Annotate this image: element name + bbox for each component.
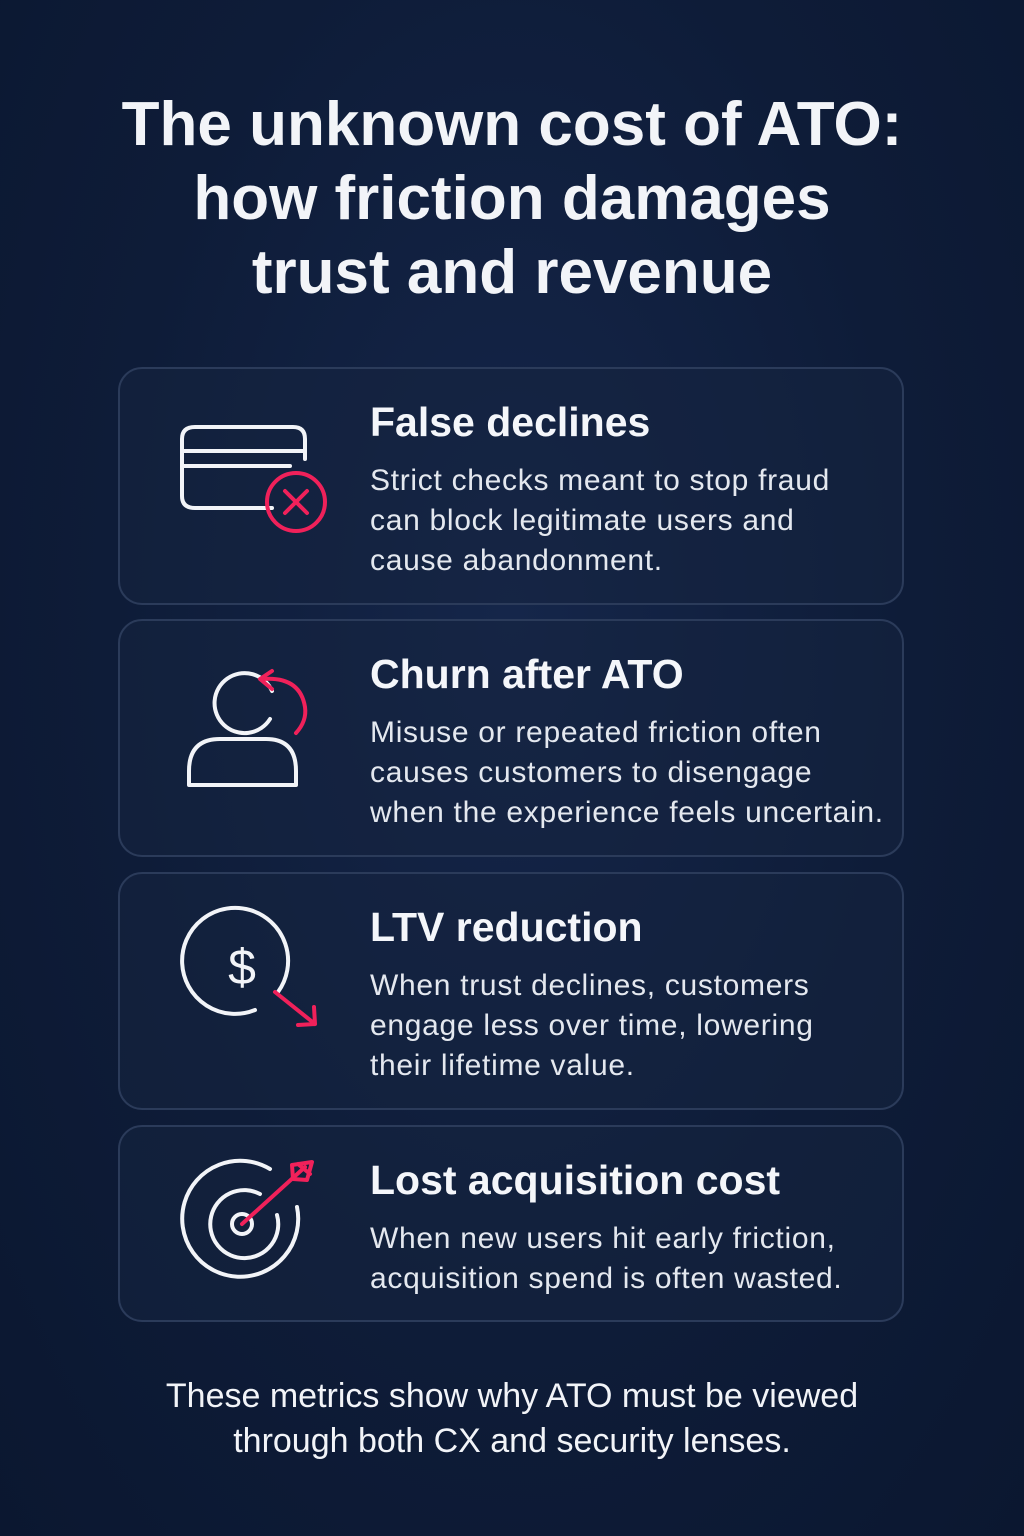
text: Misuse or repeated friction often bbox=[370, 716, 822, 749]
text: their lifetime value. bbox=[370, 1049, 635, 1082]
panel: LTV bbox=[118, 872, 904, 1110]
panel: churn bbox=[118, 619, 904, 857]
icon: target with arrow bbox=[180, 1158, 314, 1279]
text bbox=[370, 1222, 842, 1295]
icon: dollar with down arrow: $ bbox=[228, 939, 256, 995]
text bbox=[370, 716, 884, 829]
panel: acquisition bbox=[118, 1125, 904, 1322]
text: causes customers to disengage bbox=[370, 756, 812, 789]
title: The unknown cost of ATO: bbox=[122, 90, 902, 159]
title: how friction damages bbox=[193, 164, 831, 233]
text: when the experience feels uncertain. bbox=[370, 796, 884, 829]
text: Strict checks meant to stop fraud bbox=[370, 464, 830, 497]
text: engage less over time, lowering bbox=[370, 1009, 814, 1042]
heading: Churn after ATO bbox=[370, 651, 684, 697]
icon: card with x bbox=[180, 425, 327, 533]
text: can block legitimate users and bbox=[370, 504, 795, 537]
title: trust and revenue bbox=[252, 238, 772, 307]
text: acquisition spend is often wasted. bbox=[370, 1262, 842, 1295]
icon: dollar with down arrow bbox=[180, 906, 318, 1027]
text: cause abandonment. bbox=[370, 544, 663, 577]
text bbox=[370, 464, 830, 577]
heading: Lost acquisition cost bbox=[370, 1157, 780, 1203]
text bbox=[370, 969, 814, 1082]
title bbox=[122, 90, 902, 307]
footer: through both CX and security lenses. bbox=[233, 1422, 791, 1460]
heading: LTV reduction bbox=[370, 904, 643, 950]
icon: user with return arrow bbox=[187, 668, 308, 787]
footer: These metrics show why ATO must be viewed bbox=[166, 1377, 858, 1415]
panel: false declines bbox=[118, 367, 904, 605]
text: When trust declines, customers bbox=[370, 969, 810, 1002]
text: When new users hit early friction, bbox=[370, 1222, 836, 1255]
heading: False declines bbox=[370, 399, 650, 445]
footer bbox=[166, 1377, 858, 1460]
